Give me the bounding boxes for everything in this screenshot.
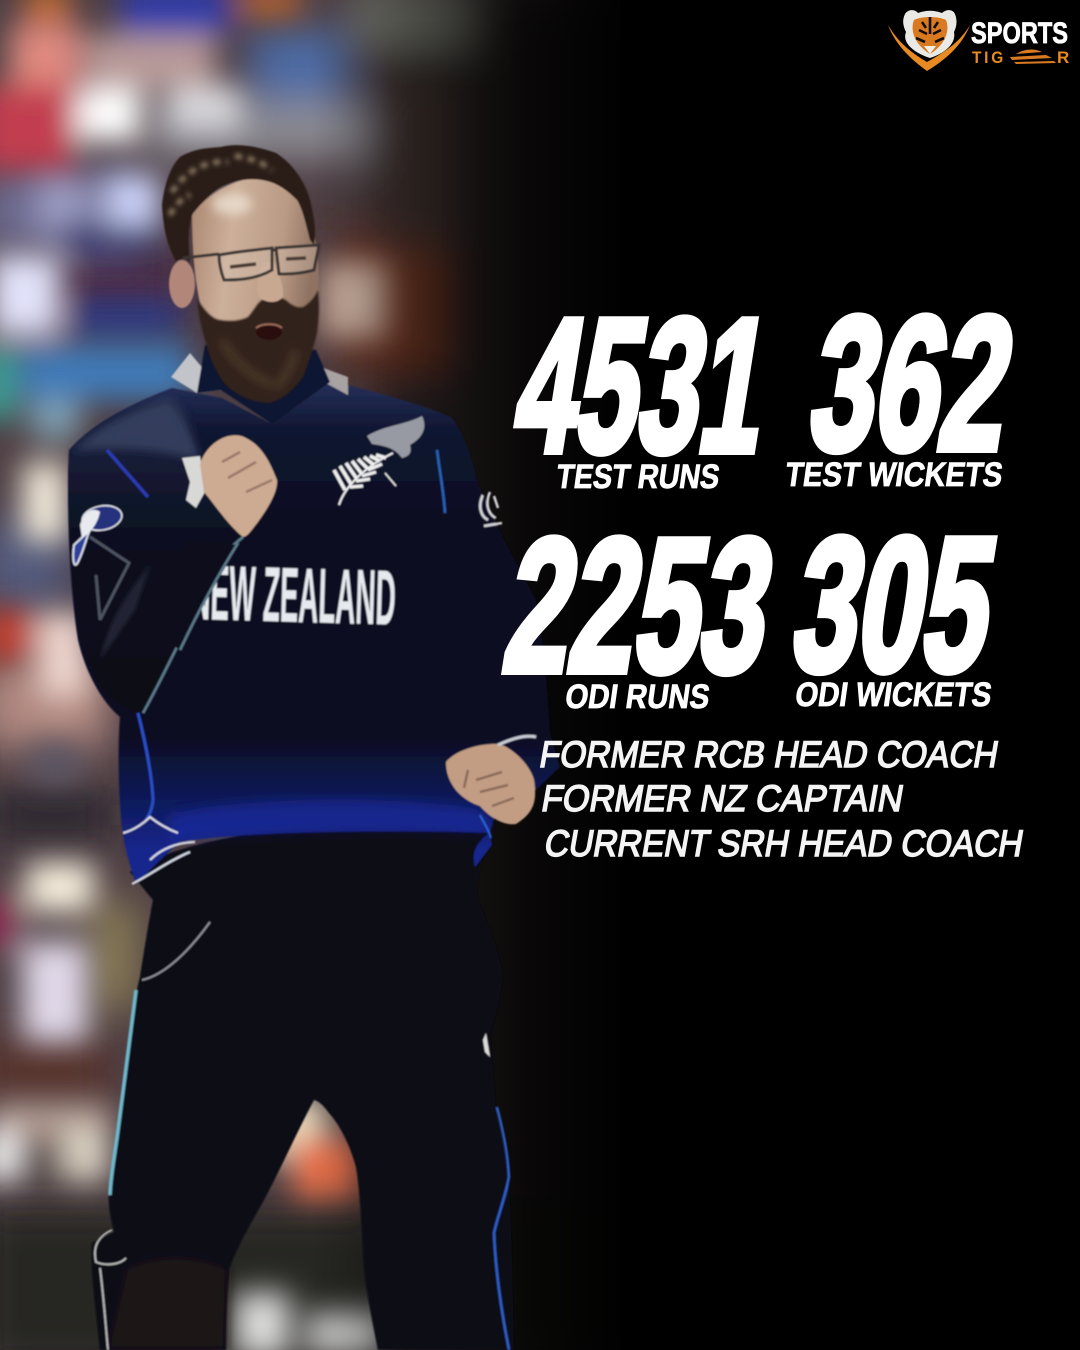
armpit gap bbox=[450, 692, 468, 744]
forehead highlight bbox=[212, 193, 252, 215]
jersey body and sleeves bbox=[68, 382, 560, 884]
hem piping bbox=[480, 815, 491, 838]
stats block bbox=[494, 277, 1027, 716]
neck collar dark bbox=[197, 345, 330, 424]
sleeve seam bbox=[143, 537, 243, 713]
eyes bbox=[230, 258, 306, 267]
trouser right piping bbox=[494, 1107, 509, 1350]
silver fern badge bbox=[334, 453, 396, 505]
raised fist bbox=[200, 435, 277, 537]
hair bbox=[162, 145, 315, 262]
stat: 4531 test runs: 4531 bbox=[504, 279, 783, 492]
trousers bbox=[92, 820, 514, 1350]
logo word: TIGER: TIG bbox=[972, 48, 1006, 67]
head bbox=[162, 145, 319, 403]
cuff detail bbox=[498, 736, 536, 745]
blurred stadium crowd background bbox=[0, 0, 640, 1350]
white wrist band bbox=[182, 456, 206, 508]
trouser logo bbox=[483, 1033, 490, 1057]
nose bbox=[257, 262, 283, 302]
blue sleeve stripe bbox=[107, 450, 148, 497]
fist finger lines bbox=[222, 452, 272, 492]
sunlit shoulder panel bbox=[72, 398, 200, 462]
career roles text block: CURRENT SRH HEAD COACH bbox=[542, 822, 1027, 864]
stat: 4531 test runs: TEST RUNS bbox=[554, 458, 722, 496]
mouth bbox=[256, 324, 282, 340]
trouser left piping bbox=[110, 990, 136, 1195]
player: Daniel Vettori in New Zealand kit bbox=[68, 145, 560, 1350]
stat: 2253 odi runs bbox=[494, 499, 787, 716]
career roles text block: FORMER RCB HEAD COACH bbox=[537, 733, 1002, 775]
player: Daniel Vettori in New Zealand kit: NEW ZEALAND bbox=[190, 548, 397, 642]
logo letter: R: R bbox=[1057, 48, 1069, 67]
stat: 4531 test runs bbox=[504, 279, 783, 496]
logo stripes bbox=[1010, 50, 1056, 64]
collar bbox=[171, 353, 221, 393]
trouser knee edge bbox=[95, 1230, 126, 1350]
seam over lettering bbox=[180, 543, 238, 650]
tiger face orange bbox=[913, 17, 947, 54]
shoulder bird patch bbox=[367, 416, 424, 458]
beard bbox=[197, 290, 319, 403]
tiger head outline bbox=[903, 10, 957, 58]
sleeve sponsor logo bbox=[73, 503, 129, 620]
lower hand finger lines bbox=[464, 770, 514, 806]
career roles text block: FORMER NZ CAPTAIN bbox=[539, 777, 907, 819]
tiger muzzle bbox=[924, 46, 936, 54]
stat: 362 test wickets: TEST WICKETS bbox=[783, 456, 1005, 494]
hair highlights bbox=[170, 156, 272, 215]
jersey hem shading bbox=[170, 799, 490, 840]
career roles text block bbox=[537, 733, 1027, 864]
forearm edge covering lettering bbox=[150, 540, 238, 650]
beard highlights bbox=[222, 340, 296, 388]
sleeve sheen bbox=[100, 565, 150, 660]
lower hand bbox=[446, 744, 535, 824]
white hem flare bbox=[123, 817, 195, 884]
torso blue piping bbox=[138, 713, 153, 820]
ear bbox=[169, 260, 195, 308]
stat: 2253 odi runs: ODI RUNS bbox=[563, 678, 712, 716]
left arm sleeve bbox=[68, 400, 243, 713]
face bbox=[192, 178, 319, 381]
trouser pocket swoosh bbox=[142, 922, 210, 980]
sports tiger logo bbox=[888, 10, 1069, 71]
stat: 2253 odi runs: 2253 bbox=[494, 499, 787, 712]
lips bbox=[256, 324, 282, 328]
right arm piping bbox=[437, 450, 445, 513]
canterbury logo on sleeve bbox=[480, 492, 502, 526]
stat: 305 odi wickets: ODI WICKETS bbox=[793, 676, 994, 714]
logo chevron bbox=[888, 25, 970, 71]
glasses bbox=[183, 245, 319, 280]
lower left leg lighter shading bbox=[106, 1256, 228, 1350]
tiger stripes bbox=[916, 17, 944, 42]
dark gradient fade to black on the right bbox=[310, 0, 1080, 1350]
